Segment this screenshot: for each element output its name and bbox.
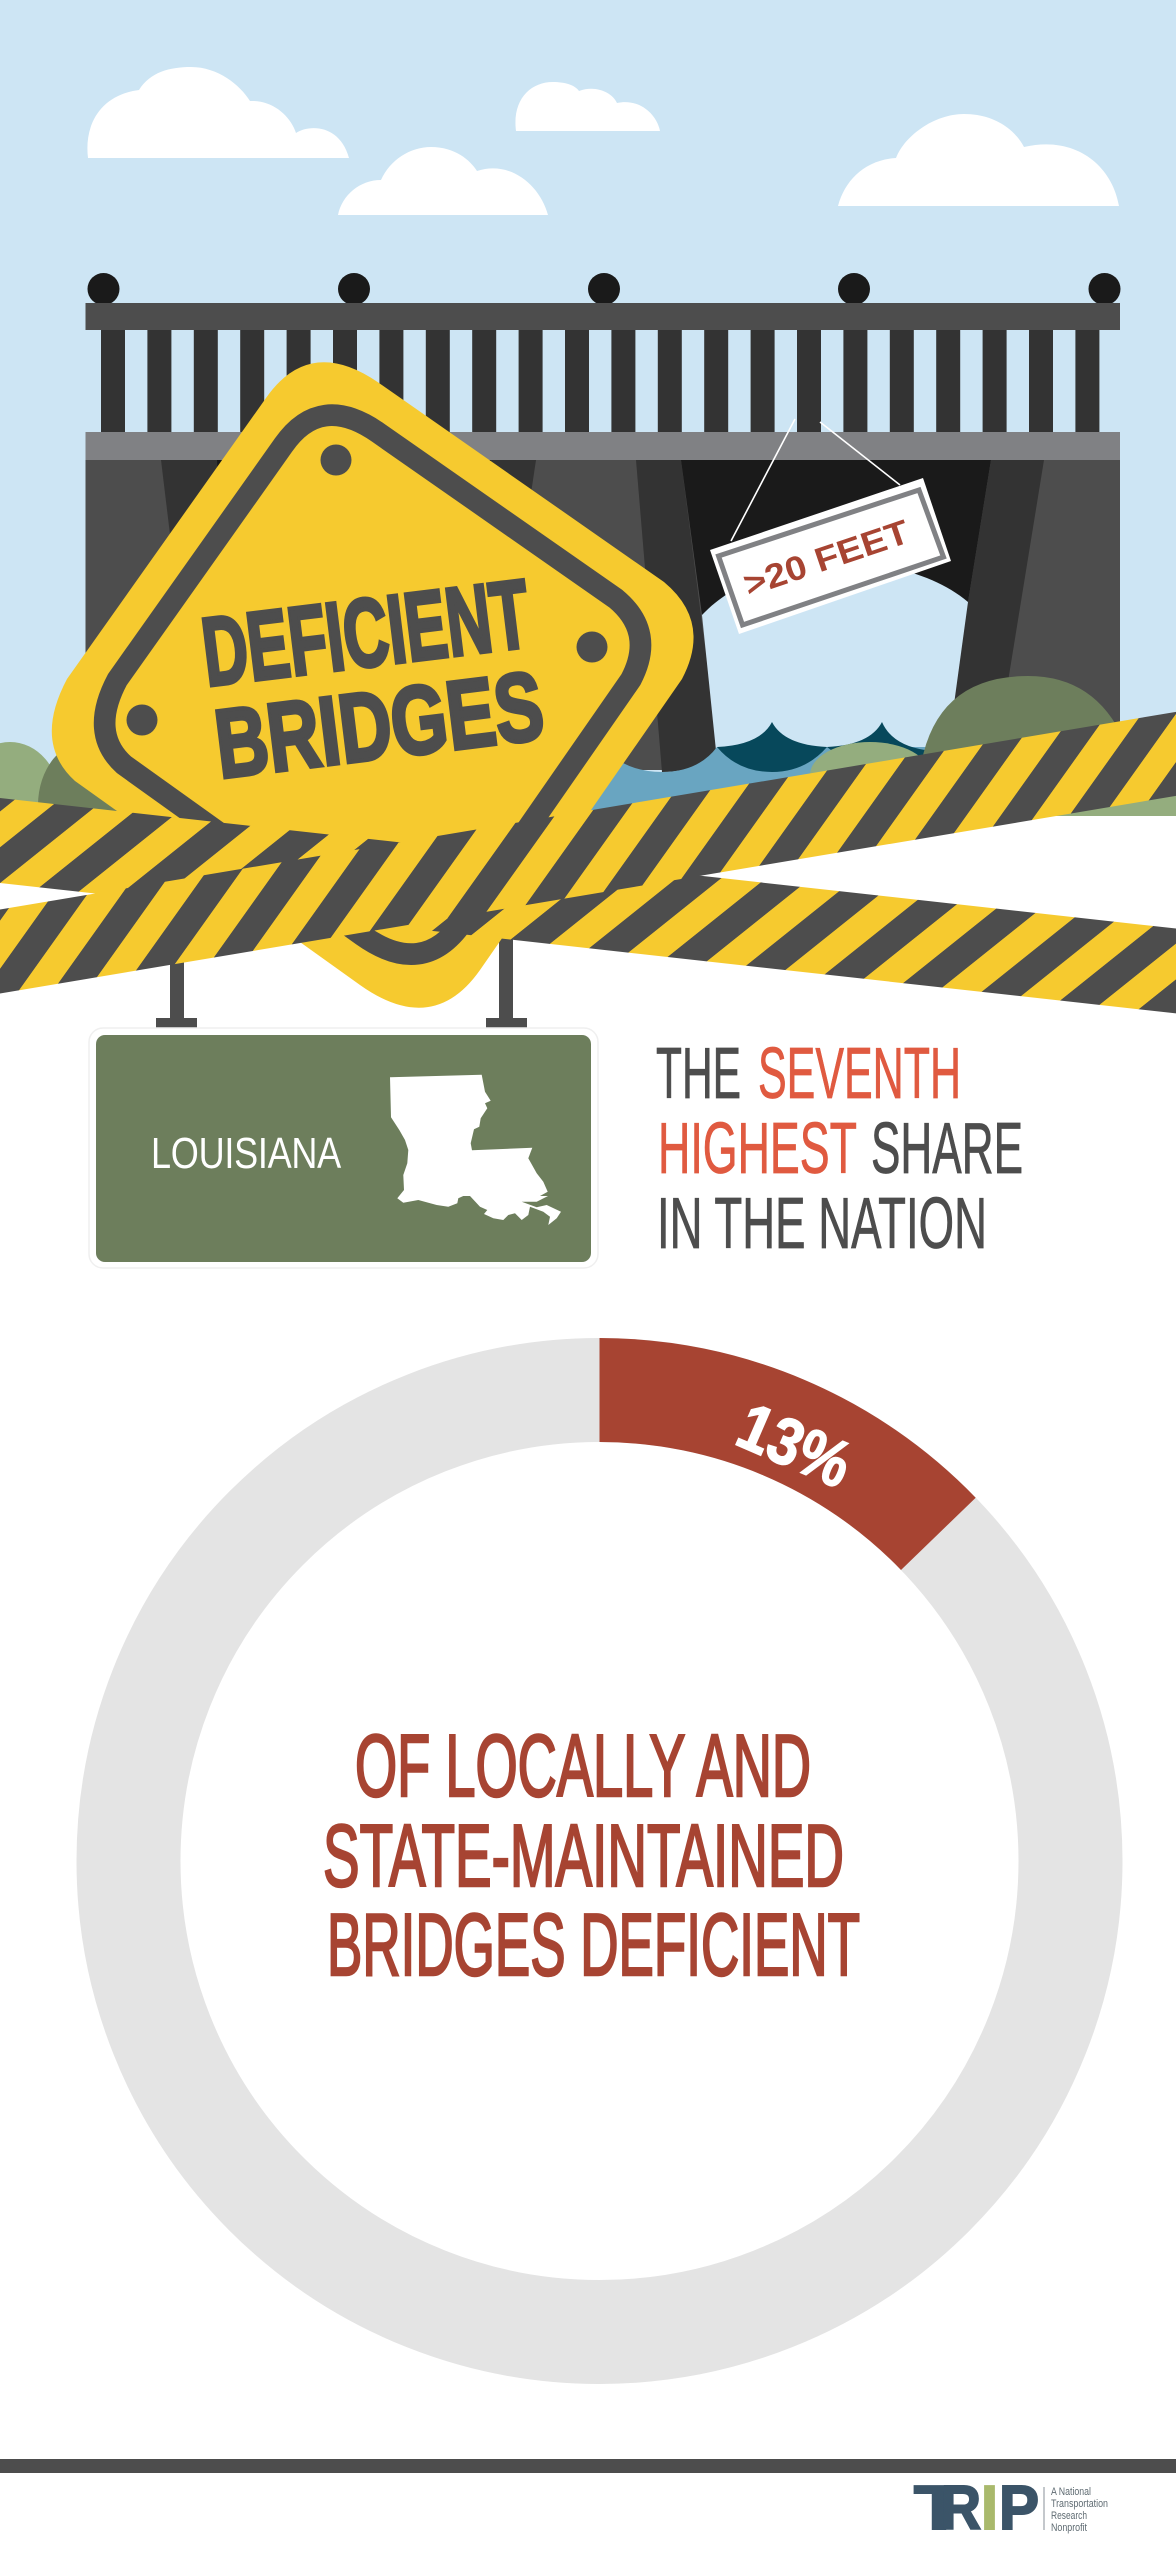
sky through arch bbox=[702, 563, 968, 770]
hanging clearance sign bbox=[710, 419, 951, 634]
logo wordmark: I bbox=[981, 2474, 998, 2543]
left arch bbox=[161, 460, 536, 700]
sign title: BRIDGES bbox=[209, 651, 549, 799]
donut caption: STATE-MAINTAINED bbox=[323, 1806, 844, 1905]
donut caption bbox=[323, 1716, 860, 1994]
value label: 13% bbox=[727, 1388, 863, 1502]
sign plate bbox=[710, 478, 951, 634]
logo wordmark: R bbox=[941, 2474, 981, 2543]
caution tape: rising bbox=[0, 702, 1176, 1002]
sign inner band bbox=[105, 415, 640, 954]
sign posts bbox=[156, 900, 527, 1028]
bushes bbox=[0, 676, 1114, 812]
logo tagline: Nonprofit bbox=[1051, 2522, 1087, 2534]
water bbox=[500, 747, 930, 867]
logo tagline bbox=[1051, 2486, 1108, 2534]
logo wordmark bbox=[914, 2474, 1039, 2543]
sign title bbox=[196, 559, 549, 799]
logo tagline: A National bbox=[1051, 2486, 1091, 2498]
right arch opening bbox=[681, 460, 991, 615]
ranking statement: THE bbox=[656, 1033, 741, 1114]
sign body bbox=[52, 362, 694, 1008]
donut track bbox=[128, 1390, 1070, 2332]
donut value 13% bbox=[600, 1338, 976, 1570]
ranking statement: HIGHEST bbox=[658, 1108, 857, 1189]
sign face bbox=[96, 1035, 591, 1262]
icon: louisiana state map bbox=[390, 1075, 561, 1225]
caution tape: falling bbox=[0, 792, 1176, 1021]
ground strip bbox=[930, 770, 1176, 816]
bridge piers bbox=[86, 460, 1120, 770]
deficient bridges warning sign bbox=[52, 362, 694, 1008]
bridge bbox=[86, 273, 1120, 772]
ranking statement: SEVENTH bbox=[758, 1033, 961, 1114]
pier shadow bbox=[636, 460, 718, 772]
sign label: >20 FEET bbox=[739, 513, 914, 604]
donut caption: OF LOCALLY AND bbox=[355, 1716, 811, 1815]
louisiana road sign bbox=[89, 1028, 598, 1268]
waves bbox=[717, 722, 925, 772]
right pier shadow bbox=[949, 460, 1044, 720]
sky background bbox=[0, 0, 1176, 816]
logo tagline: Research bbox=[1051, 2510, 1087, 2522]
logo wordmark: P bbox=[999, 2474, 1039, 2543]
sign border bbox=[718, 490, 944, 625]
railing posts bbox=[88, 273, 1120, 305]
railing balusters bbox=[101, 330, 1099, 432]
clouds bbox=[87, 67, 1119, 215]
hanging wires bbox=[731, 419, 900, 541]
ranking statement: IN THE NATION bbox=[657, 1183, 987, 1264]
sign title: DEFICIENT bbox=[196, 559, 535, 707]
sign screws bbox=[126, 444, 608, 736]
sign frame bbox=[89, 1028, 598, 1268]
bridge deck bbox=[86, 432, 1120, 460]
railing top bar bbox=[86, 303, 1120, 330]
ranking statement bbox=[656, 1033, 1023, 1264]
ranking statement: SHARE bbox=[871, 1108, 1023, 1189]
logo divider bbox=[1044, 2487, 1045, 2530]
logo wordmark: T bbox=[914, 2474, 964, 2543]
state name: LOUISIANA bbox=[151, 1129, 341, 1178]
donut chart bbox=[128, 1338, 1070, 2332]
logo tagline: Transportation bbox=[1051, 2498, 1108, 2510]
footer bar bbox=[0, 2459, 1176, 2473]
trip logo bbox=[914, 2474, 1108, 2543]
